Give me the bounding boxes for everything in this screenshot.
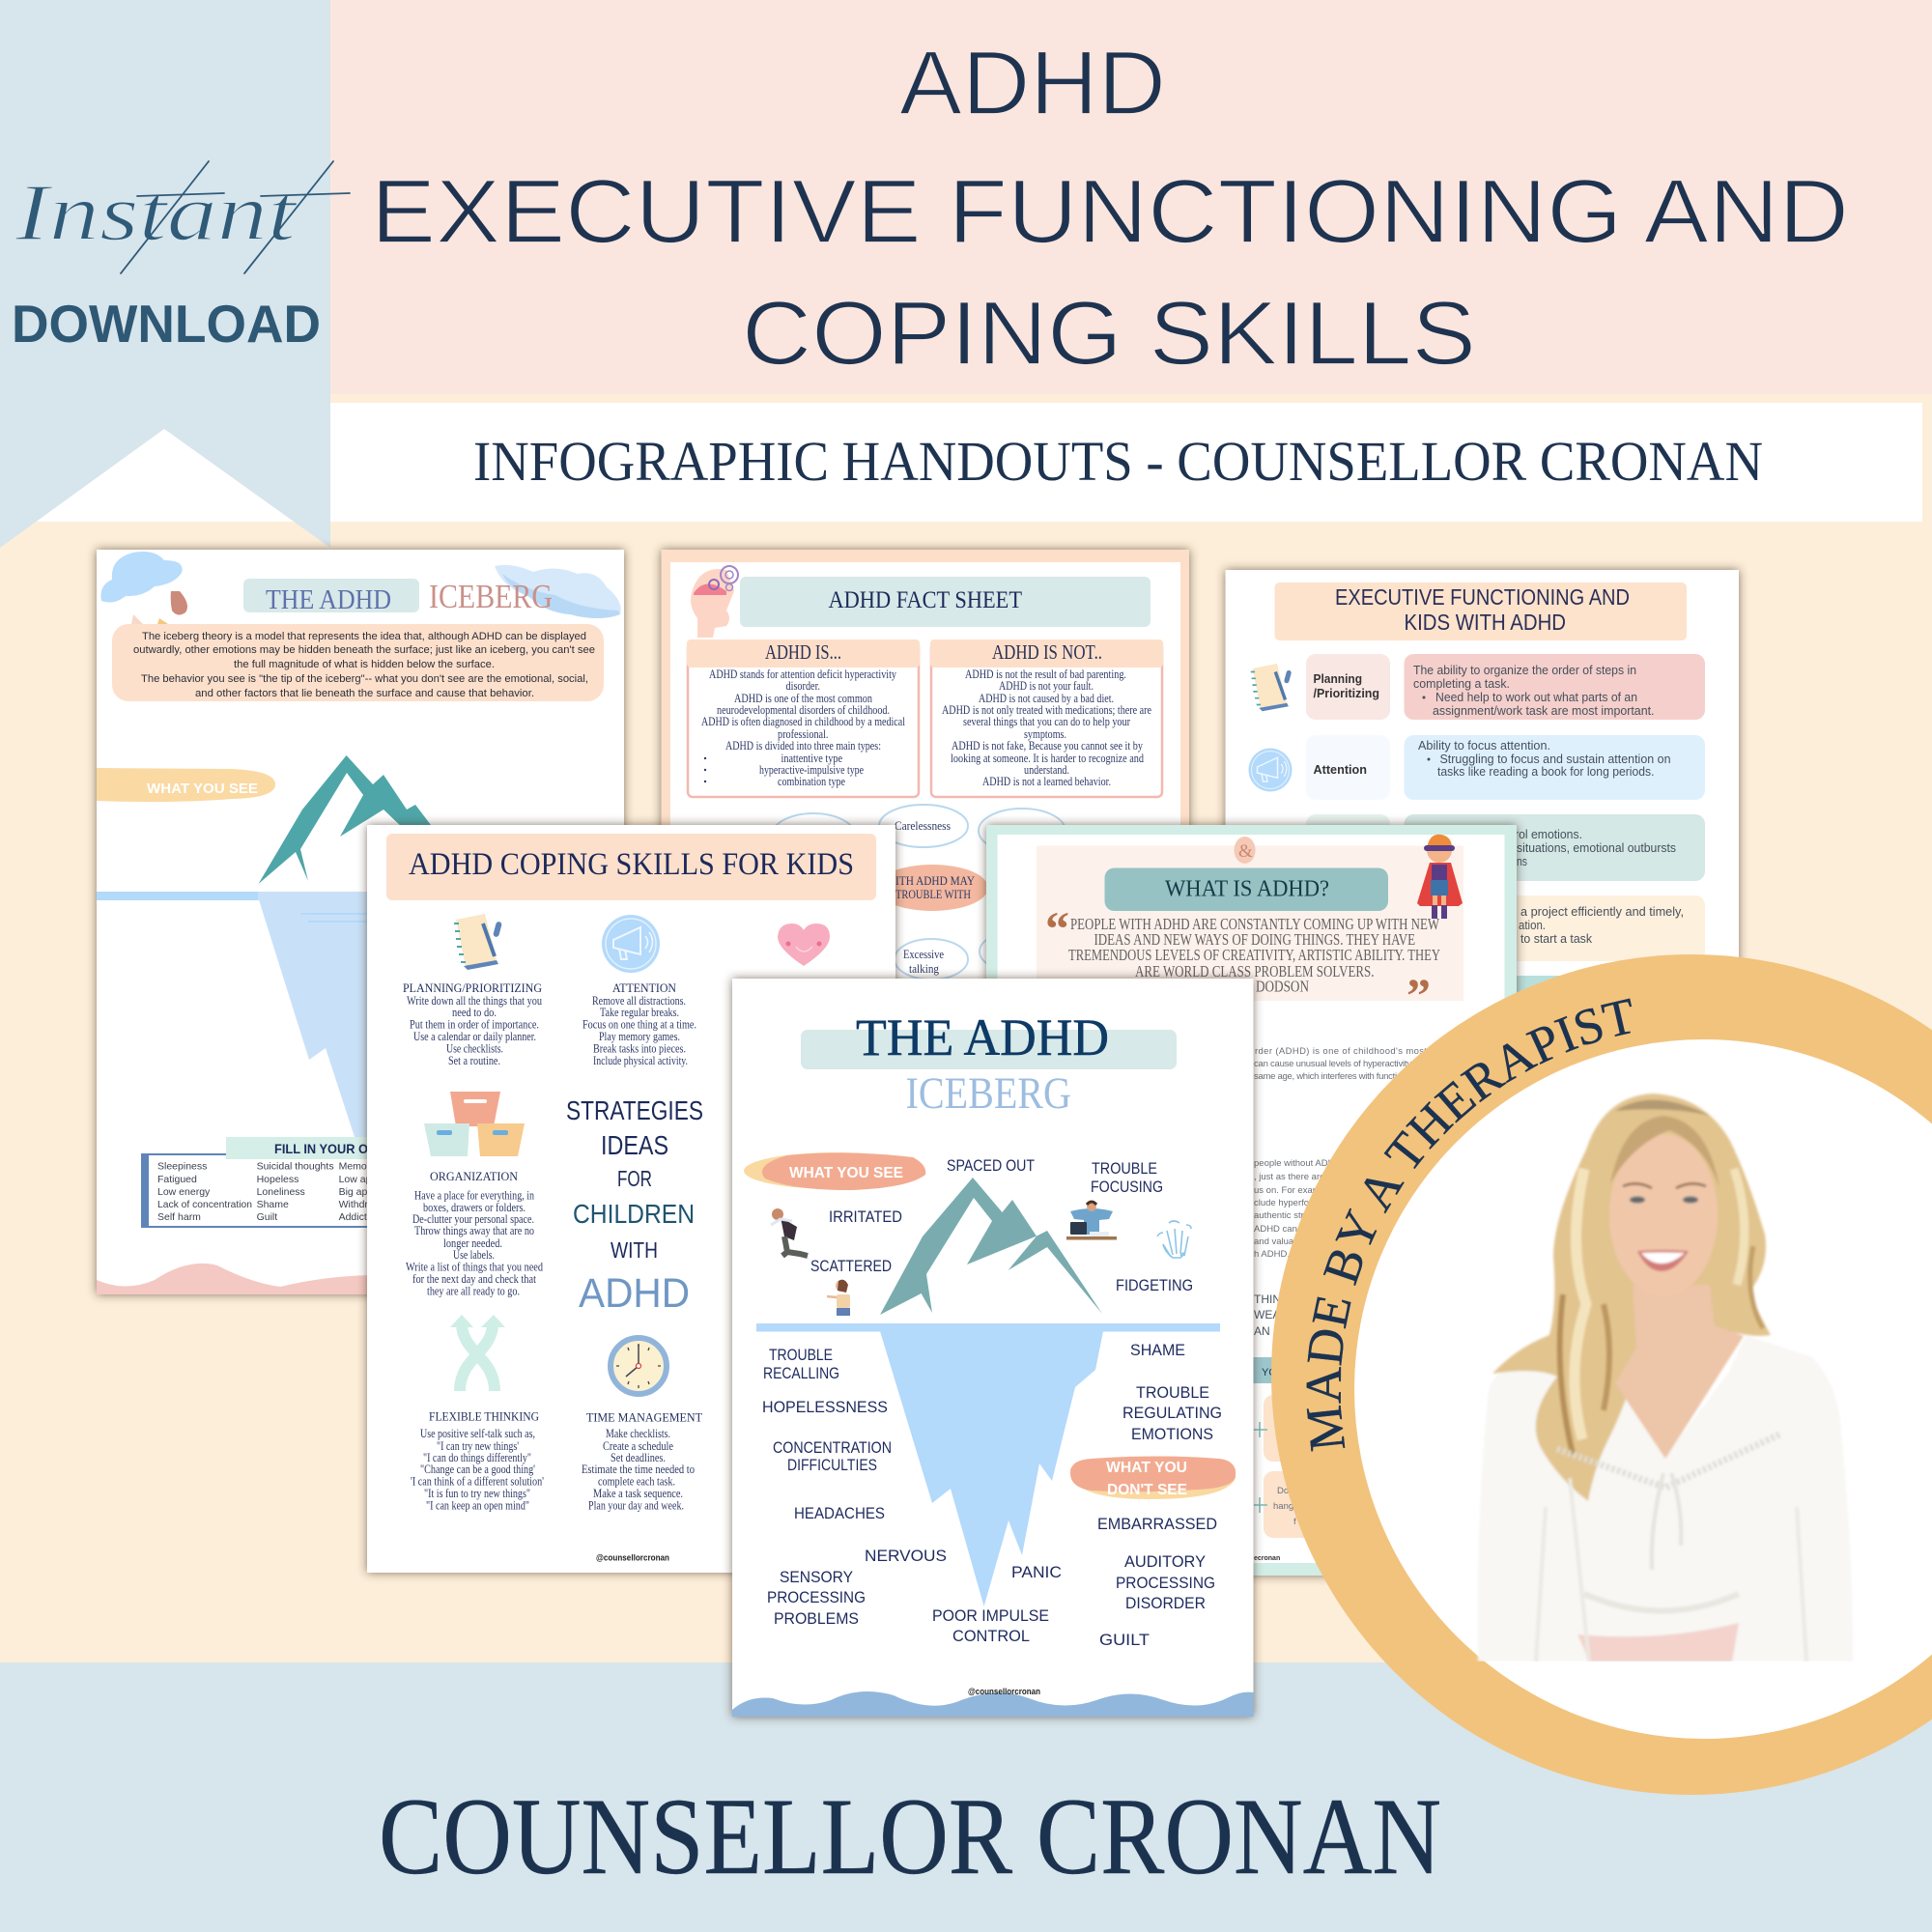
column: ADHD is bbox=[687, 639, 920, 797]
quotation: IDEAS AND NEW WAYS OF DOING THINGS. THEY HAVE bbox=[1094, 930, 1415, 949]
label: what you don't see bbox=[1070, 1457, 1236, 1499]
panel: executive functioning and kids with ADHD bbox=[1225, 570, 1739, 1150]
smile bbox=[1637, 1250, 1689, 1271]
column: ADHD is not: understand. bbox=[1024, 763, 1069, 777]
center heading: strategies ideas: CHILDREN bbox=[573, 1199, 695, 1229]
panel: the ADHD iceberg poster bbox=[732, 979, 1254, 1717]
icon: megaphone bbox=[602, 915, 660, 973]
heading pill bbox=[801, 1030, 1177, 1069]
main title: ADHD bbox=[899, 32, 1166, 133]
intro callout: The behavior you see is "the tip of the iceberg"-- what you don't see are the emotional, social, bbox=[141, 673, 588, 685]
ovals: Carelessness bbox=[895, 819, 951, 833]
block: flexible thinking: "Change can be a good thing' bbox=[420, 1463, 535, 1476]
quotation: DODSON bbox=[1256, 978, 1309, 995]
center heading: strategies ideas: ADHD bbox=[579, 1270, 690, 1317]
body copy: , just as there are bbox=[1254, 1172, 1324, 1182]
block: organization: boxes, drawers or folders. bbox=[423, 1201, 526, 1214]
body copy: us on. For exam bbox=[1254, 1185, 1321, 1196]
column: ADHD is: ADHD is often diagnosed in childhood by a medical bbox=[701, 715, 905, 728]
fill in table: Fatigued bbox=[157, 1174, 197, 1185]
hair back bbox=[1492, 1094, 1771, 1501]
block: time management bbox=[582, 1410, 702, 1513]
quotation: TREMENDOUS LEVELS OF CREATIVITY, ARTISTIC ABILITY. THEY bbox=[1068, 946, 1440, 964]
row: planning: The ability to organize the order of steps in bbox=[1413, 664, 1636, 677]
neck and chest bbox=[1615, 1285, 1744, 1459]
block: time management: Estimate the time needed to bbox=[582, 1463, 695, 1476]
water line bbox=[97, 892, 271, 900]
subtitle: INFOGRAPHIC HANDOUTS - COUNSELLOR CRONAN bbox=[473, 430, 1763, 493]
heading ICEBERG: ICEBERG bbox=[906, 1068, 1071, 1119]
quote pane bbox=[1037, 846, 1463, 1001]
label: what you don't see: DON'T SEE bbox=[1107, 1482, 1187, 1498]
block: flexible thinking: "I can keep an open mind" bbox=[426, 1499, 529, 1513]
icon: crossing arrows bbox=[450, 1315, 505, 1391]
body copy: authentic str bbox=[1254, 1210, 1304, 1221]
ovals bbox=[771, 805, 1065, 980]
block: organization: Use labels. bbox=[453, 1248, 495, 1262]
quotation: PEOPLE WITH ADHD ARE CONSTANTLY COMING UP WITH NEW bbox=[1070, 915, 1440, 933]
column: ADHD is not: ADHD is not a learned behavior. bbox=[982, 775, 1111, 788]
heading pill THE ADHD bbox=[243, 579, 419, 612]
block: organization: Have a place for everything, in bbox=[414, 1188, 535, 1202]
badge: instant download bbox=[12, 161, 350, 354]
row: planning: assignment/work task are most important. bbox=[1433, 704, 1654, 718]
fill in table: Memo bbox=[339, 1161, 367, 1173]
panel: ADHD coping skills for kids bbox=[367, 825, 895, 1573]
center heading: strategies ideas bbox=[566, 1095, 703, 1317]
row: attention: Attention bbox=[1314, 762, 1367, 777]
iceberg top bbox=[880, 1178, 1102, 1315]
body copy: people without ADHD bbox=[1254, 1158, 1341, 1169]
row: attention: Ability to focus attention. bbox=[1418, 739, 1550, 753]
word DOWNLOAD: DOWNLOAD bbox=[12, 294, 321, 354]
eyes and brows bbox=[1623, 1183, 1706, 1188]
block: flexible thinking: "It is fun to try new things" bbox=[424, 1487, 530, 1500]
white subtitle band bbox=[0, 403, 1922, 522]
block: attention: ATTENTION bbox=[612, 980, 677, 995]
panel: the ADHD iceberg worksheet bbox=[97, 550, 624, 1294]
icon: monogram: & bbox=[1238, 841, 1253, 862]
ovals: talking bbox=[909, 962, 940, 976]
hidden symptoms: DISORDER bbox=[1125, 1594, 1206, 1612]
column: ADHD is: hyperactive-impulsive type bbox=[759, 763, 864, 777]
column: ADHD is not bbox=[930, 639, 1163, 797]
hair highlights and shadows bbox=[1575, 1169, 1586, 1439]
fill in table: Guilt bbox=[257, 1211, 277, 1223]
block: organization bbox=[406, 1169, 544, 1298]
label: what you see: WHAT YOU SEE bbox=[147, 781, 258, 797]
intro callout: outwardly, other emotions may be hidden beneath the surface; just like an iceberg, you can't see bbox=[133, 644, 595, 656]
row: emotional control: situations, emotional outbursts bbox=[1517, 841, 1676, 855]
icon: heart bbox=[778, 923, 830, 966]
blouse details bbox=[1536, 1435, 1806, 1662]
block: organization: they are all ready to go. bbox=[427, 1285, 520, 1298]
body copy bbox=[1254, 1046, 1427, 1338]
column: ADHD is not: ADHD is not the result of bad parenting. bbox=[965, 668, 1126, 681]
fill in table: Shame bbox=[257, 1199, 289, 1210]
column: ADHD is not: ADHD is not fake, Because you cannot see it by bbox=[952, 739, 1144, 753]
hidden symptoms: SHAME bbox=[1130, 1341, 1185, 1359]
column: ADHD is: ADHD is divided into three main types: bbox=[725, 739, 881, 753]
icon: cloud and drops bbox=[100, 552, 187, 624]
row: emotional control: rol emotions. bbox=[1515, 828, 1582, 841]
hidden symptoms: TROUBLE bbox=[769, 1346, 833, 1364]
quotation: ARE WORLD CLASS PROBLEM SOLVERS. bbox=[1135, 962, 1374, 980]
skirt bbox=[1577, 1623, 1739, 1662]
block: time management: TIME MANAGEMENT bbox=[586, 1410, 702, 1425]
footer brand name: COUNSELLOR CRONAN bbox=[379, 1776, 1441, 1897]
center heading: strategies ideas: FOR bbox=[617, 1166, 652, 1191]
heading text ICEBERG: ICEBERG bbox=[429, 578, 553, 615]
column: ADHD is: neurodevelopmental disorders of childhood. bbox=[717, 703, 890, 717]
ovals: Excessive bbox=[903, 948, 944, 961]
heading pill bbox=[386, 834, 876, 900]
row: task initiation bbox=[1405, 895, 1705, 961]
fill in table: Low energy bbox=[157, 1186, 211, 1198]
block: time management: complete each task. bbox=[598, 1474, 675, 1488]
hidden symptoms: HEADACHES bbox=[794, 1504, 885, 1522]
column: ADHD is not: ADHD is not your fault. bbox=[999, 679, 1094, 693]
column: ADHD is not: ADHD is not caused by a bad diet. bbox=[979, 692, 1114, 705]
teal bar and cards bbox=[1252, 1357, 1426, 1562]
ovals: TROUBLE WITH bbox=[895, 888, 971, 901]
pink wave bbox=[97, 1264, 377, 1294]
intro callout: and other factors that lie beneath the surface and cause that behavior. bbox=[195, 688, 534, 699]
intro callout: The iceberg theory is a model that represents the idea that, although ADHD can be displayed bbox=[142, 631, 586, 642]
icon: person at desk bbox=[1066, 1202, 1117, 1240]
column: ADHD is: disorder. bbox=[786, 679, 820, 693]
heading pill bbox=[1275, 582, 1687, 640]
row: emotional control: ns bbox=[1517, 855, 1527, 868]
hidden symptoms: EMBARRASSED bbox=[1097, 1515, 1217, 1533]
heading text: KIDS WITH ADHD bbox=[1405, 610, 1566, 635]
intro callout: the full magnitude of what is hidden below the surface. bbox=[234, 659, 495, 670]
block: attention: Focus on one thing at a time. bbox=[582, 1018, 696, 1032]
heading text: ADHD COPING SKILLS FOR KIDS bbox=[409, 847, 854, 882]
teal bar and cards: Do bbox=[1277, 1486, 1289, 1496]
block: time management: Create a schedule bbox=[603, 1439, 673, 1453]
badge ring: made by a therapist bbox=[1271, 954, 1932, 1795]
hidden symptoms: SENSORY bbox=[780, 1568, 853, 1586]
block: attention: Break tasks into pieces. bbox=[593, 1041, 686, 1055]
fill in table: Addict bbox=[339, 1211, 367, 1223]
block: planning/prioritizing: Use a calendar or daily planner. bbox=[413, 1030, 536, 1043]
label: what you see bbox=[744, 1152, 925, 1190]
block: organization: Write a list of things that you need bbox=[406, 1260, 544, 1273]
hidden symptoms: PANIC bbox=[1011, 1563, 1062, 1581]
curved text: MADE BY A THERAPIST bbox=[1306, 999, 1633, 1452]
hidden symptoms: EMOTIONS bbox=[1131, 1425, 1213, 1443]
fill in table: Withdr bbox=[339, 1199, 368, 1210]
fill in table: Lack of concentration bbox=[157, 1199, 252, 1210]
row: task initiation: a project efficiently and timely, bbox=[1520, 905, 1684, 919]
block: flexible thinking: "I can do things differently" bbox=[423, 1451, 531, 1464]
hidden symptoms: TROUBLE bbox=[1136, 1383, 1209, 1402]
fill in table: Hopeless bbox=[257, 1174, 298, 1185]
row: task initiation: ation. bbox=[1519, 919, 1546, 932]
panel: what is ADHD bbox=[986, 825, 1517, 1576]
fill in table bbox=[142, 1137, 374, 1227]
block: flexible thinking: 'I can think of a different solution' bbox=[411, 1474, 544, 1488]
iceberg underwater bbox=[259, 898, 386, 1150]
row: task initiation: to start a task bbox=[1520, 932, 1593, 946]
label: what you see: WHAT YOU SEE bbox=[789, 1165, 903, 1181]
column: ADHD is: ADHD IS... bbox=[765, 640, 841, 664]
column: ADHD is not: ADHD is not only treated with medications; there are bbox=[942, 703, 1151, 717]
blue wave bbox=[732, 1691, 1254, 1717]
block: flexible thinking: Use positive self-talk such as, bbox=[420, 1427, 535, 1440]
fill in table: Low ap bbox=[339, 1174, 372, 1185]
body copy: and valuab bbox=[1254, 1236, 1298, 1247]
row: attention: Struggling to focus and sustain attention on bbox=[1439, 753, 1671, 766]
block: organization: for the next day and check that bbox=[412, 1272, 536, 1286]
handle: @counsellorcronan bbox=[968, 1687, 1040, 1697]
block: time management: Make a task sequence. bbox=[593, 1487, 683, 1500]
label: what you see bbox=[97, 768, 275, 802]
block: organization: De-clutter your personal space. bbox=[412, 1212, 534, 1226]
heading pill bbox=[740, 577, 1151, 627]
center heading: strategies ideas: WITH bbox=[611, 1237, 658, 1263]
main title: EXECUTIVE FUNCTIONING AND bbox=[371, 160, 1849, 262]
hidden symptoms: GUILT bbox=[1099, 1631, 1150, 1649]
visible symptoms bbox=[810, 1156, 1193, 1294]
top pink header band bbox=[330, 0, 1932, 394]
hidden symptoms: NERVOUS bbox=[865, 1547, 947, 1565]
bookmark ribbon bbox=[0, 0, 330, 548]
hidden symptoms: HOPELESSNESS bbox=[762, 1398, 888, 1416]
heading text bbox=[1335, 584, 1630, 635]
icon: notebook bbox=[454, 914, 502, 970]
column: ADHD is: professional. bbox=[778, 727, 829, 741]
visible symptoms: FOCUSING bbox=[1091, 1178, 1163, 1196]
teal bar and cards: ecronan bbox=[1254, 1555, 1280, 1562]
visible symptoms: TROUBLE bbox=[1092, 1159, 1157, 1178]
column: ADHD is not: ADHD IS NOT.. bbox=[992, 640, 1102, 664]
icon: superhero bbox=[1417, 835, 1463, 919]
quotation: ” bbox=[1406, 968, 1431, 1022]
body copy: clude hyperfoc bbox=[1254, 1198, 1314, 1208]
row: emotional control bbox=[1306, 814, 1705, 881]
heading text: ADHD FACT SHEET bbox=[829, 587, 1022, 613]
fill in table: Sleepiness bbox=[157, 1161, 207, 1173]
block: planning/prioritizing: need to do. bbox=[452, 1006, 497, 1019]
hidden symptoms: CONCENTRATION bbox=[773, 1438, 892, 1457]
quotation: “ bbox=[1045, 901, 1069, 955]
bottom blue band bbox=[0, 1662, 1932, 1932]
teal bar and cards: hang bbox=[1273, 1501, 1293, 1512]
handle: @counsellorcronan bbox=[596, 1553, 669, 1563]
hidden symptoms: PROCESSING bbox=[767, 1588, 866, 1606]
quotation bbox=[1045, 901, 1440, 1022]
hidden symptoms: POOR IMPULSE bbox=[932, 1606, 1049, 1625]
visible symptoms: SPACED OUT bbox=[947, 1156, 1035, 1175]
row: attention bbox=[1248, 735, 1705, 800]
panel: ADHD fact sheet bbox=[661, 550, 1189, 1063]
block: organization: longer needed. bbox=[443, 1236, 502, 1250]
block: planning/prioritizing: PLANNING/PRIORITIZING bbox=[403, 980, 542, 995]
hidden symptoms bbox=[762, 1341, 1222, 1649]
block: organization: ORGANIZATION bbox=[430, 1169, 519, 1183]
water line bbox=[756, 1323, 1220, 1331]
center heading: strategies ideas: IDEAS bbox=[601, 1130, 668, 1160]
icon: fidgeting hand bbox=[1157, 1221, 1191, 1258]
body copy: AN bbox=[1254, 1324, 1270, 1338]
main title: COPING SKILLS bbox=[742, 282, 1476, 384]
row: planning: completing a task. bbox=[1413, 677, 1510, 691]
hidden symptoms: CONTROL bbox=[952, 1627, 1030, 1645]
block: time management: Set deadlines. bbox=[611, 1451, 666, 1464]
fill in table: Loneliness bbox=[257, 1186, 305, 1198]
column: ADHD is: combination type bbox=[778, 775, 845, 788]
row: planning: Planning bbox=[1314, 671, 1362, 686]
icon: stressed woman bbox=[771, 1208, 808, 1256]
visible symptoms: SCATTERED bbox=[810, 1257, 892, 1275]
icon: storage boxes bbox=[424, 1092, 525, 1156]
row: teal bbox=[1405, 976, 1705, 1041]
column: ADHD is: ADHD stands for attention deficit hyperactivity bbox=[709, 668, 897, 681]
icon: head with spirals bbox=[691, 566, 738, 638]
iceberg underwater bbox=[880, 1331, 1103, 1606]
label: what you don't see: WHAT YOU bbox=[1106, 1460, 1187, 1476]
block: time management: Make checklists. bbox=[606, 1427, 670, 1440]
fill in table: Big app bbox=[339, 1186, 373, 1198]
heading text: WHAT IS ADHD? bbox=[1165, 877, 1329, 902]
hidden symptoms: REGULATING bbox=[1122, 1404, 1222, 1422]
teal bar and cards: YO bbox=[1262, 1367, 1277, 1378]
body copy: h ADHD. bbox=[1254, 1249, 1290, 1260]
fill in table: Suicidal thoughts bbox=[257, 1161, 334, 1173]
block: flexible thinking: "I can try new things' bbox=[437, 1439, 519, 1453]
icon: monogram bbox=[1235, 837, 1256, 864]
block: attention: Remove all distractions. bbox=[592, 994, 686, 1008]
intro callout bbox=[112, 624, 604, 701]
block: planning/prioritizing: Put them in order of importance. bbox=[410, 1018, 539, 1032]
heading text: EXECUTIVE FUNCTIONING AND bbox=[1335, 584, 1630, 610]
heading text THE ADHD: THE ADHD bbox=[266, 585, 391, 615]
fill in table: Self harm bbox=[157, 1211, 201, 1223]
body copy: rder (ADHD) is one of childhood's most bbox=[1255, 1046, 1427, 1057]
block: planning/prioritizing: Use checklists. bbox=[446, 1041, 503, 1055]
row: planning: Need help to work out what parts of an bbox=[1435, 691, 1637, 704]
column: ADHD is not: several things that you can do to help your bbox=[963, 715, 1131, 728]
face bbox=[1609, 1134, 1718, 1296]
block: planning/prioritizing bbox=[403, 980, 543, 1067]
column: ADHD is: inattentive type bbox=[781, 752, 842, 765]
hidden symptoms: PROBLEMS bbox=[774, 1609, 859, 1628]
block: organization: Throw things away that are no bbox=[414, 1224, 534, 1237]
column: ADHD is not: symptoms. bbox=[1024, 727, 1066, 741]
teal bar and cards: f bbox=[1293, 1517, 1296, 1527]
heading THE ADHD: THE ADHD bbox=[856, 1009, 1109, 1066]
column: ADHD is: ADHD is one of the most common bbox=[734, 692, 873, 705]
block: flexible thinking: FLEXIBLE THINKING bbox=[429, 1409, 539, 1424]
center heading: strategies ideas: STRATEGIES bbox=[566, 1095, 703, 1125]
main title bbox=[371, 32, 1849, 384]
block: planning/prioritizing: Write down all the things that you bbox=[407, 994, 543, 1008]
block: attention bbox=[582, 980, 696, 1067]
row: attention: tasks like reading a book for long periods. bbox=[1437, 765, 1654, 779]
row: planning: /Prioritizing bbox=[1314, 686, 1379, 700]
icon: right cloud bbox=[495, 565, 621, 618]
hidden symptoms: AUDITORY bbox=[1124, 1552, 1206, 1571]
body copy: ADHD can u bbox=[1254, 1224, 1305, 1235]
blouse bbox=[1478, 1335, 1853, 1662]
iceberg top bbox=[259, 755, 431, 884]
block: attention: Play memory games. bbox=[599, 1030, 680, 1043]
block: flexible thinking bbox=[411, 1409, 544, 1513]
row: planning bbox=[1251, 654, 1705, 720]
block: attention: Take regular breaks. bbox=[600, 1006, 679, 1019]
block: attention: Include physical activity. bbox=[593, 1054, 688, 1067]
script word Instant: Instant bbox=[14, 168, 298, 258]
visible symptoms: IRRITATED bbox=[829, 1208, 902, 1226]
hidden symptoms: DIFFICULTIES bbox=[787, 1456, 877, 1474]
portrait of therapist bbox=[1478, 1094, 1853, 1662]
icon: woman with phone bbox=[827, 1280, 850, 1316]
body copy: THING bbox=[1254, 1293, 1290, 1306]
icon: clock bbox=[611, 1338, 667, 1394]
body copy: WEAK bbox=[1254, 1308, 1288, 1321]
fill in table: FILL IN YOUR O bbox=[274, 1141, 368, 1156]
block: time management: Plan your day and week. bbox=[588, 1499, 684, 1513]
heading pill bbox=[1105, 867, 1388, 911]
ovals: ITH ADHD MAY bbox=[895, 874, 975, 888]
hidden symptoms: RECALLING bbox=[763, 1364, 839, 1382]
block: planning/prioritizing: Set a routine. bbox=[448, 1054, 500, 1067]
hidden symptoms: PROCESSING bbox=[1116, 1574, 1215, 1592]
visible symptoms: FIDGETING bbox=[1116, 1276, 1193, 1294]
column: ADHD is not: looking at someone. It is harder to recognize and bbox=[951, 752, 1145, 765]
body copy: can cause unusual levels of hyperactivity bbox=[1254, 1059, 1411, 1069]
body copy: same age, which interferes with functioning bbox=[1254, 1071, 1418, 1082]
